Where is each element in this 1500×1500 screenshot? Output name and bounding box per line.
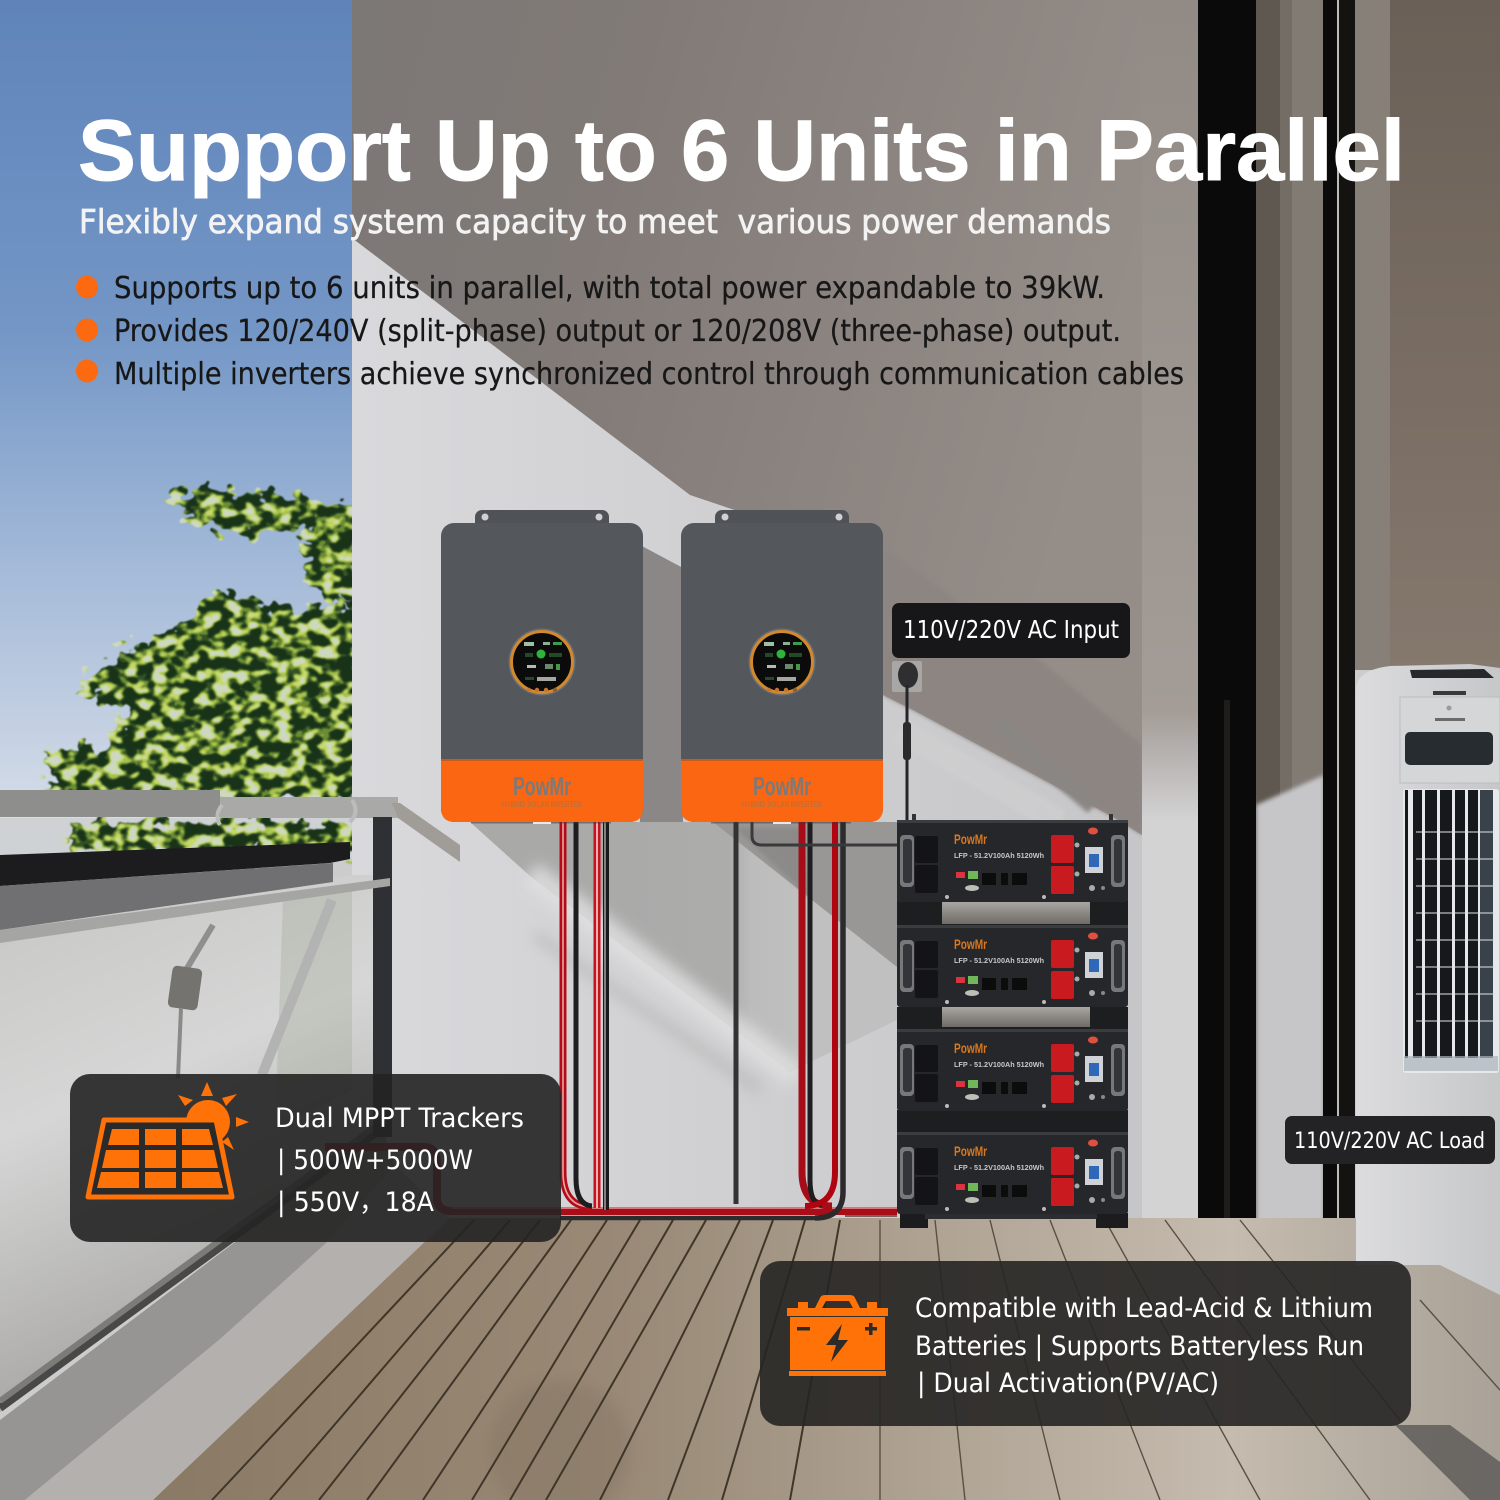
background: shaded wall: [352, 0, 1142, 1225]
battery module 1: [897, 820, 1128, 902]
bullet 1: Supports up to 6 units in parallel, with total power expandable to 39kW.: [114, 271, 1105, 306]
battery module 3: PowMr: [954, 1040, 987, 1056]
battery module 2: PowMr: [954, 936, 987, 952]
battery module 1: LFP - 51.2V100Ah 5120Wh: [954, 853, 1044, 860]
background: foliage: [0, 488, 375, 858]
background: right wall and door frame: [1142, 0, 1500, 1415]
inverter right: HYBRID SOLAR INVERTER: [742, 800, 822, 809]
inverter left: PowMr: [513, 771, 571, 801]
background: balcony railing and glass: [0, 790, 460, 1500]
panel text: | Dual Activation(PV/AC): [917, 1368, 1219, 1399]
air cooler: [1356, 664, 1500, 1295]
bullet list: [76, 271, 1184, 392]
label: AC load: [1285, 1116, 1495, 1164]
icon: battery: [787, 1295, 888, 1376]
background: sky: [0, 0, 352, 820]
label: AC input: [892, 603, 1130, 658]
battery module 2: LFP - 51.2V100Ah 5120Wh: [954, 958, 1044, 965]
wall socket and plug cable: [892, 661, 1113, 821]
inverter left: HYBRID SOLAR INVERTER: [502, 800, 582, 809]
inverter right: PowMr: [753, 771, 811, 801]
bullet 2: Provides 120/240V (split-phase) output or 120/208V (three-phase) output.: [114, 314, 1121, 349]
panel text: | 550V，18A: [277, 1187, 434, 1218]
panel: battery compatibility: [760, 1261, 1411, 1426]
battery module 3: LFP - 51.2V100Ah 5120Wh: [954, 1062, 1044, 1069]
background: floor: [153, 1218, 1500, 1500]
title: Support Up to 6 Units in Parallel: [78, 103, 1405, 199]
panel text: [275, 1103, 524, 1218]
battery module 2: [897, 925, 1128, 1007]
panel text: Dual MPPT Trackers: [275, 1103, 524, 1134]
panel text: Compatible with Lead-Acid & Lithium: [915, 1293, 1373, 1324]
battery module 4: PowMr: [954, 1143, 987, 1159]
battery module 4: [897, 1132, 1128, 1214]
battery module 3: [897, 1029, 1128, 1111]
inverter right: [681, 510, 883, 824]
label: AC input: 110V/220V AC Input: [903, 615, 1119, 644]
icon: solar panel and sun: [88, 1082, 249, 1197]
battery module 1: PowMr: [954, 831, 987, 847]
panel: dual MPPT trackers: [70, 1074, 561, 1242]
battery stack: [897, 820, 1128, 1228]
panel text: | 500W+5000W: [277, 1145, 473, 1176]
wiring: inverter to battery cables: [325, 822, 897, 1218]
bullet 3: Multiple inverters achieve synchronized control through communication cables: [114, 357, 1184, 392]
panel text: [915, 1293, 1373, 1399]
battery module 4: LFP - 51.2V100Ah 5120Wh: [954, 1165, 1044, 1172]
subtitle: Flexibly expand system capacity to meet various power demands: [79, 203, 1111, 241]
inverter left: [441, 510, 643, 824]
panel text: Batteries | Supports Batteryless Run: [915, 1331, 1364, 1362]
